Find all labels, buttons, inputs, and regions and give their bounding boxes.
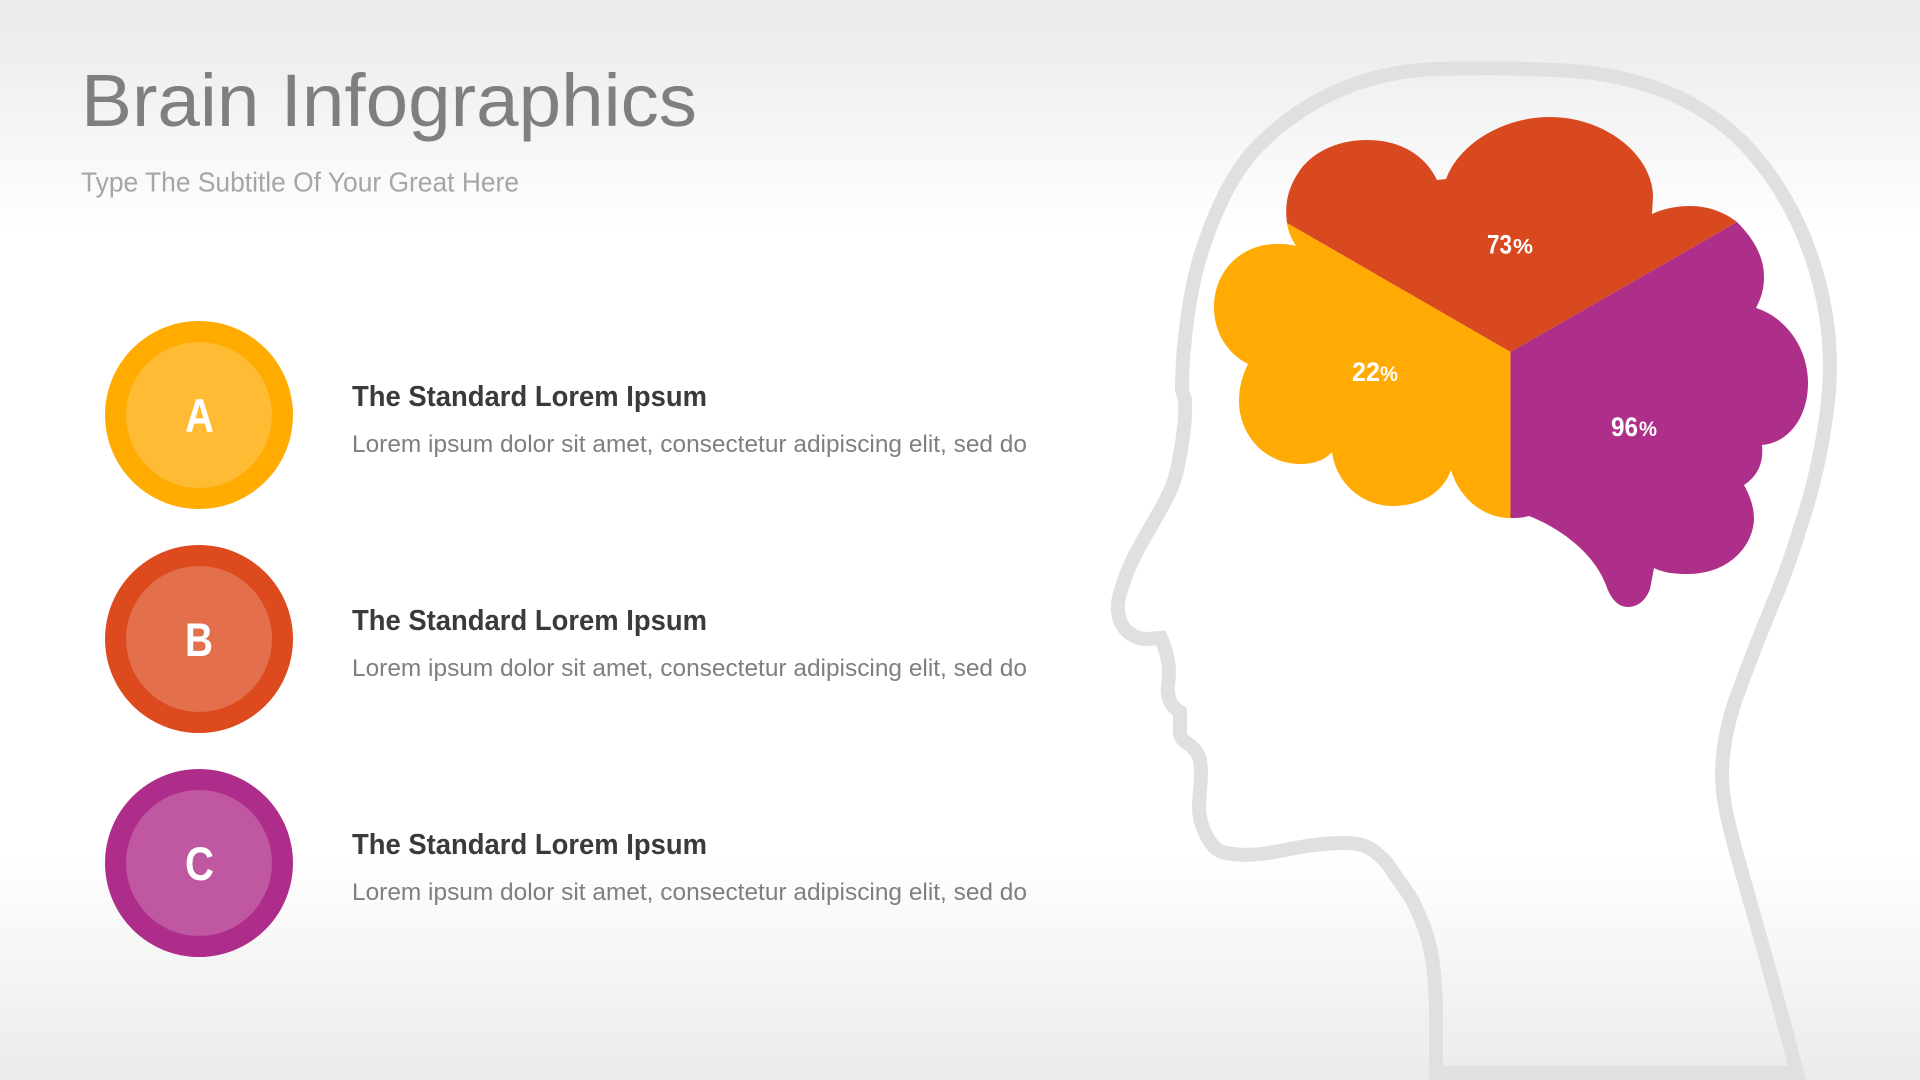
text: item A: Lorem ipsum dolor sit amet, consectetur adipiscing elit, sed do <box>352 431 1027 458</box>
panel: item B <box>105 545 1027 733</box>
label: 22%: 22 <box>1352 357 1380 387</box>
icon: badge B <box>105 545 293 733</box>
icon: badge A <box>105 321 293 509</box>
head outline <box>1118 68 1830 1073</box>
label: 96%: 96 <box>1611 412 1638 442</box>
chart: brain <box>1214 117 1808 607</box>
heading: item A: The Standard Lorem Ipsum <box>352 381 707 413</box>
panel: item C <box>105 769 1027 957</box>
panel: item A <box>105 321 1027 509</box>
segment: purple 96% <box>1510 222 1808 607</box>
label: 22% <box>1352 357 1398 387</box>
heading: item B: The Standard Lorem Ipsum <box>352 605 707 637</box>
heading: item C: The Standard Lorem Ipsum <box>352 829 707 861</box>
segment: orange 73% <box>1286 117 1737 352</box>
label: 73%: % <box>1513 236 1533 258</box>
icon: badge A: A <box>185 389 214 442</box>
label: 73%: 73 <box>1487 230 1512 260</box>
icon: badge C: C <box>185 837 214 890</box>
label: 96%: % <box>1639 418 1657 441</box>
subtitle: Type The Subtitle Of Your Great Here <box>81 166 519 198</box>
text: item B: Lorem ipsum dolor sit amet, consectetur adipiscing elit, sed do <box>352 655 1027 682</box>
segment: yellow 22% <box>1214 223 1510 518</box>
label: 73% <box>1487 230 1533 260</box>
text: item C: Lorem ipsum dolor sit amet, consectetur adipiscing elit, sed do <box>352 879 1027 906</box>
title: Brain Infographics <box>81 59 697 142</box>
icon: badge C <box>105 769 293 957</box>
icon: badge B: B <box>185 613 213 666</box>
label: 22%: % <box>1380 363 1398 386</box>
label: 96% <box>1611 412 1657 442</box>
